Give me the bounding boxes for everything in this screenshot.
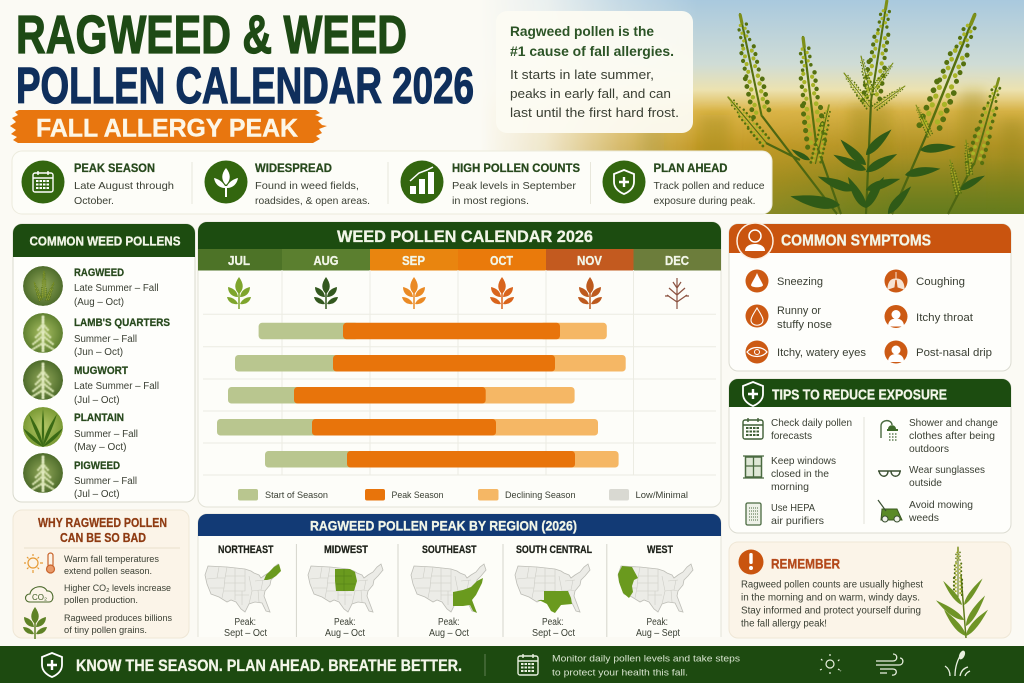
title: RAGWEED & WEED <box>16 5 407 65</box>
icon: grass <box>945 651 970 676</box>
legend: Start of Season <box>265 490 328 501</box>
symptom: coughing: Coughing <box>916 276 965 288</box>
weed: pigweed: (Jul – Oct) <box>74 489 120 500</box>
icon: person <box>737 223 773 259</box>
header photo: ragweed field <box>480 0 1024 216</box>
weed: lamb's quarters <box>23 313 170 358</box>
footer banner <box>0 646 1024 683</box>
weed: plantain: (May – Oct) <box>74 442 126 453</box>
tip: HEPA purifiers <box>746 502 824 527</box>
callout: ragweed intro: Ragweed pollen is the <box>510 23 654 39</box>
fact: widespread: roadsides, & open areas. <box>255 195 370 207</box>
bar: ragweed <box>259 323 607 339</box>
text: billions of grains: of tiny pollen grains. <box>64 625 147 636</box>
bar: pigweed <box>265 451 619 468</box>
footer banner: to protect your health this fall. <box>552 668 688 678</box>
fact: peak season <box>22 160 174 207</box>
region: midwest: MIDWEST <box>324 544 368 556</box>
weed: mugwort: MUGWORT <box>74 365 128 377</box>
symptom: itchy throat <box>884 305 973 328</box>
fact: plan ahead: exposure during peak. <box>654 195 756 207</box>
icon: pollen <box>820 654 841 674</box>
weed: lamb's quarters: Summer – Fall <box>74 334 137 345</box>
region: northeast: Peak: <box>234 617 256 628</box>
title: POLLEN CALENDAR 2026 <box>16 57 474 114</box>
footer banner: Monitor daily pollen levels and take steps <box>552 654 740 664</box>
icon: CO2 cloud: CO₂ <box>32 593 47 602</box>
tip: shower <box>881 417 998 455</box>
month headers: DEC <box>665 253 690 268</box>
tip: keep windows closed: morning <box>771 481 809 493</box>
icon: month leaves <box>227 277 689 309</box>
panel: tips to reduce exposure <box>729 379 1011 533</box>
region: south central: Peak: <box>542 617 564 628</box>
text: remember note <box>741 580 923 630</box>
region: south central: Sept – Oct <box>532 628 575 639</box>
weed: mugwort: Late Summer – Fall <box>74 381 159 392</box>
month headers <box>198 249 721 270</box>
text: CO2 <box>64 583 171 606</box>
tip: keep windows closed: closed in the <box>771 468 829 480</box>
text: billions of grains <box>64 613 172 636</box>
tip: keep windows closed: Keep windows <box>771 455 836 467</box>
weed: plantain: PLANTAIN <box>74 412 124 424</box>
text: warm temperatures <box>64 554 159 577</box>
legend: Peak Season <box>392 490 444 501</box>
region: west <box>618 544 693 639</box>
region: southeast: Peak: <box>438 617 460 628</box>
tip: check forecasts: forecasts <box>771 430 812 442</box>
panel: weed pollen calendar: WEED POLLEN CALENDAR 2026 <box>337 228 593 246</box>
footer banner: KNOW THE SEASON. PLAN AHEAD. BREATHE BETTER. <box>76 657 462 675</box>
tip: mowing: weeds <box>908 512 939 524</box>
fact: high pollen counts <box>400 160 580 207</box>
region: midwest: Peak: <box>334 617 356 628</box>
panel: common weed pollens <box>13 224 195 502</box>
region: midwest <box>308 544 383 639</box>
weed: ragweed: Late Summer – Fall <box>74 283 158 294</box>
panel: remember <box>729 542 1011 638</box>
symptom: itchy eyes: Itchy, watery eyes <box>777 347 867 359</box>
tip: sunglasses: Wear sunglasses <box>909 464 985 476</box>
symptom: itchy eyes <box>746 340 867 364</box>
panel: common symptoms: COMMON SYMPTOMS <box>781 232 931 250</box>
region: southeast: SOUTHEAST <box>422 544 477 556</box>
fact: peak season: Late August through <box>74 180 174 192</box>
bar: lamb's quarters <box>235 355 626 372</box>
icon: ragweed plant <box>934 547 990 638</box>
symptom: post-nasal drip: Post-nasal drip <box>916 347 992 359</box>
weed: ragweed: RAGWEED <box>74 267 124 279</box>
legend: Declining Season <box>505 490 576 501</box>
tip: shower: outdoors <box>909 443 949 455</box>
text: remember note: Stay informed and protect yourself during <box>741 606 921 616</box>
icon: wind <box>876 654 903 675</box>
month headers: OCT <box>490 253 513 268</box>
region: south central: SOUTH CENTRAL <box>516 544 592 556</box>
panel: ragweed pollen peak by region: RAGWEED POLLEN PEAK BY REGION (2026) <box>310 518 577 534</box>
panel: why ragweed pollen can be so bad: WHY RAGWEED POLLEN <box>38 516 167 530</box>
region: midwest: Aug – Oct <box>325 628 365 639</box>
text: CO2: Higher CO₂ levels increase <box>64 583 171 594</box>
region: west: WEST <box>647 544 673 556</box>
fact: widespread <box>204 160 370 207</box>
symptom: sneezing: Sneezing <box>777 276 823 288</box>
month headers: SEP <box>402 253 425 268</box>
region: west: Peak: <box>646 617 668 628</box>
fact: plan ahead: PLAN AHEAD <box>654 163 728 175</box>
callout: ragweed intro: last until the first hard frost. <box>510 105 679 120</box>
weed: pigweed <box>23 453 137 500</box>
icon: CO2 cloud <box>26 587 53 602</box>
tip: keep windows closed <box>743 455 836 493</box>
region: southeast: Aug – Oct <box>429 628 469 639</box>
bar: mugwort <box>228 387 575 404</box>
fact: plan ahead: Track pollen and reduce <box>654 180 765 192</box>
panel: tips to reduce exposure: TIPS TO REDUCE EXPOSURE <box>772 386 947 404</box>
tip: sunglasses: outside <box>909 477 942 489</box>
fact: plan ahead <box>602 160 765 207</box>
icon: exclamation <box>738 550 764 574</box>
weed: mugwort: (Jul – Oct) <box>74 395 120 406</box>
tip: HEPA purifiers: Use HEPA <box>771 502 815 514</box>
weed: plantain <box>23 407 138 453</box>
callout: ragweed intro: peaks in early fall, and can <box>510 86 671 101</box>
title <box>16 5 474 114</box>
tip: check forecasts: Check daily pollen <box>771 417 852 429</box>
icon: sun and thermometer <box>24 553 54 573</box>
panel: why ragweed pollen can be so bad: CAN BE SO BAD <box>60 531 146 545</box>
fact: high pollen counts: HIGH POLLEN COUNTS <box>452 163 580 175</box>
region: northeast: Sept – Oct <box>224 628 267 639</box>
fact: high pollen counts: in most regions. <box>452 195 529 207</box>
symptom: sneezing <box>746 270 823 292</box>
bar: plantain <box>217 419 598 436</box>
text: warm temperatures: Warm fall temperatures <box>64 554 159 565</box>
panel: ragweed pollen peak by region <box>198 514 721 639</box>
icon: leaf <box>23 607 47 639</box>
weed: plantain: Summer – Fall <box>74 429 138 440</box>
region: west: Aug – Sept <box>636 628 680 639</box>
panel: common symptoms <box>729 223 1011 371</box>
tip: mowing <box>878 499 973 524</box>
month headers: AUG <box>314 253 338 268</box>
text: warm temperatures: extend pollen season. <box>64 566 152 577</box>
legend <box>238 489 688 501</box>
callout: ragweed intro <box>496 11 693 133</box>
weed: ragweed <box>23 266 158 308</box>
symptom: runny nose: stuffy nose <box>777 319 832 331</box>
weed: ragweed: (Aug – Oct) <box>74 297 124 308</box>
symptom: runny nose: Runny or <box>777 305 821 317</box>
text: CO2: pollen production. <box>64 595 138 606</box>
tip: HEPA purifiers: air purifiers <box>771 515 824 527</box>
weed: lamb's quarters: (Jun – Oct) <box>74 347 123 358</box>
panel: remember: REMEMBER <box>771 556 840 572</box>
weed: mugwort <box>23 360 159 406</box>
weed: pigweed: PIGWEED <box>74 460 120 472</box>
region: south central <box>515 544 592 639</box>
symptom: post-nasal drip <box>884 340 992 364</box>
text: billions of grains: Ragweed produces billions <box>64 613 172 624</box>
region: northeast: NORTHEAST <box>218 544 274 556</box>
month headers: JUL <box>228 253 250 268</box>
tip: shower: Shower and change <box>909 417 998 429</box>
callout: ragweed intro: #1 cause of fall allergies. <box>510 43 674 59</box>
tip: check forecasts <box>743 417 852 442</box>
panel: key facts strip <box>12 151 772 214</box>
month headers: NOV <box>577 253 602 268</box>
panel: common weed pollens: COMMON WEED POLLENS <box>30 234 180 248</box>
panel: why ragweed pollen can be so bad <box>13 510 189 639</box>
fact: widespread: WIDESPREAD <box>255 163 332 175</box>
legend: Low/Minimal <box>636 490 688 501</box>
text: remember note: Ragweed pollen counts are usually highest <box>741 580 923 590</box>
weed: pigweed: Summer – Fall <box>74 476 137 487</box>
text: remember note: in the morning and on warm, windy days. <box>741 592 920 604</box>
fact: widespread: Found in weed fields, <box>255 180 359 192</box>
fact: peak season: October. <box>74 195 114 207</box>
tip: sunglasses <box>878 464 985 489</box>
symptom: itchy throat: Itchy throat <box>916 312 973 324</box>
subtitle banner: fall allergy peak: FALL ALLERGY PEAK <box>36 114 298 142</box>
symptom: runny nose <box>746 304 832 331</box>
callout: ragweed intro: It starts in late summer, <box>510 67 654 82</box>
fact: high pollen counts: Peak levels in September <box>452 180 577 192</box>
tip: shower: clothes after being <box>909 430 995 442</box>
panel: weed pollen calendar <box>198 222 721 507</box>
text: remember note: the fall allergy peak! <box>741 618 827 630</box>
tip: mowing: Avoid mowing <box>909 499 973 511</box>
region: northeast <box>205 544 281 639</box>
region: southeast <box>411 544 486 639</box>
symptom: coughing <box>884 270 965 292</box>
fact: peak season: PEAK SEASON <box>74 163 155 175</box>
weed: lamb's quarters: LAMB'S QUARTERS <box>74 317 170 329</box>
